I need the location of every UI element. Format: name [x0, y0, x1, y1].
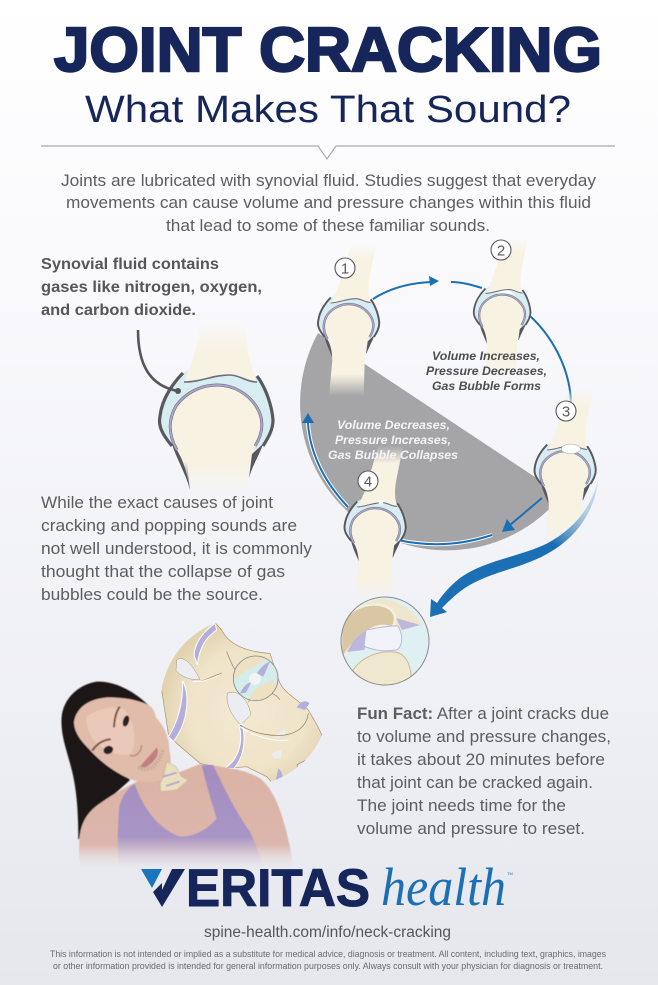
- bone contours: [192, 652, 308, 735]
- synovial fluid callout: gases like nitrogen, oxygen,: [41, 279, 262, 296]
- header divider with notch: [41, 146, 615, 159]
- tank top: [118, 765, 263, 870]
- explanatory paragraph: [41, 494, 313, 604]
- jaw skeleton overlay: [138, 750, 163, 769]
- disclaimer: [50, 949, 606, 971]
- source URL: spine-health.com/info/neck-cracking: [204, 924, 451, 941]
- label: volume increases: Gas Bubble Forms: [432, 379, 541, 393]
- step number 4: 4: [364, 474, 372, 490]
- cervical vertebrae overlay: [160, 762, 188, 792]
- label: volume decreases: Pressure Increases,: [335, 433, 451, 447]
- synovial fluid callout: Synovial fluid contains: [41, 256, 219, 273]
- joint 1: [318, 242, 379, 396]
- explanatory paragraph: While the exact causes of joint: [41, 494, 273, 512]
- step number 3: 3: [562, 404, 570, 420]
- cycle arrows: [302, 276, 571, 544]
- intro text: movements can cause volume and pressure changes within this fluid: [66, 193, 591, 212]
- label: volume decreases: Volume Decreases,: [337, 418, 450, 432]
- label: volume decreases: [328, 418, 458, 462]
- body and shoulders: [79, 764, 294, 873]
- inset circle: joint close-up: [341, 597, 429, 690]
- neck bones illustration: [162, 620, 327, 786]
- disclaimer: or other information provided is intended for general information purposes only. Always consult with your physician for diagnosis or treatment.: [53, 961, 603, 971]
- face: [74, 697, 171, 782]
- leader line from callout to joint: [138, 330, 181, 394]
- intro text: [61, 171, 597, 235]
- fun fact: that joint can be cracked again.: [357, 774, 593, 792]
- fun fact: [357, 705, 611, 838]
- fun fact: Fun Fact: After a joint cracks due: [357, 705, 609, 723]
- joint 2: [474, 237, 530, 380]
- subtitle: What Makes That Sound?: [85, 89, 571, 131]
- discs: [194, 623, 217, 665]
- nose and lips: [130, 745, 142, 756]
- eyebrows: [93, 707, 119, 750]
- step number 4: [358, 471, 378, 491]
- intro text: Joints are lubricated with synovial fluid. Studies suggest that everyday: [61, 171, 597, 190]
- intro text: that lead to some of these familiar sounds.: [166, 216, 490, 235]
- close-up ring on facet joint: [234, 659, 278, 700]
- fun fact: volume and pressure to reset.: [357, 820, 585, 838]
- step number 1: 1: [341, 260, 349, 278]
- label: volume increases: Pressure Decreases,: [426, 364, 547, 378]
- label: volume increases: Volume Increases,: [432, 349, 540, 363]
- Veritas Health logo: [141, 857, 513, 918]
- Veritas Health logo: TM: [507, 871, 513, 876]
- forehead and cheek highlight: [86, 708, 134, 755]
- step number 2: 2: [497, 242, 505, 260]
- eyes: [102, 715, 130, 756]
- label: volume increases: [426, 349, 547, 393]
- Veritas Health logo: ERITAS: [186, 859, 370, 918]
- fun fact: it takes about 20 minutes before: [357, 751, 605, 769]
- synovial fluid callout: and carbon dioxide.: [41, 302, 196, 319]
- hair: [61, 682, 150, 840]
- openings between the vertebrae: [176, 659, 200, 680]
- label: volume decreases: Gas Bubble Collapses: [328, 448, 458, 462]
- explanatory paragraph: cracking and popping sounds are: [41, 517, 297, 535]
- title: JOINT CRACKING: [54, 16, 602, 85]
- step number 1: [335, 258, 355, 278]
- synovial fluid callout: [41, 256, 262, 319]
- fun fact: The joint needs time for the: [357, 797, 566, 815]
- large joint illustration: [160, 322, 273, 492]
- joint 3: [534, 389, 596, 543]
- joint 4: [344, 446, 406, 600]
- explanatory paragraph: bubbles could be the source.: [41, 586, 263, 604]
- explanatory paragraph: thought that the collapse of gas: [41, 563, 285, 581]
- Veritas Health logo: health: [381, 857, 506, 917]
- explanatory paragraph: not well understood, it is commonly: [41, 540, 313, 558]
- woman stretching her neck: [61, 682, 294, 873]
- disclaimer: This information is not intended or implied as a substitute for medical advice, diagnosis or treatment. All content, including text, graphics, images: [50, 949, 606, 959]
- fun fact: to volume and pressure changes,: [357, 728, 611, 746]
- step number 2: [491, 240, 511, 260]
- step number 3: [556, 401, 576, 421]
- large curved arrow to inset: [430, 474, 599, 617]
- gray cycle segment: [300, 333, 562, 550]
